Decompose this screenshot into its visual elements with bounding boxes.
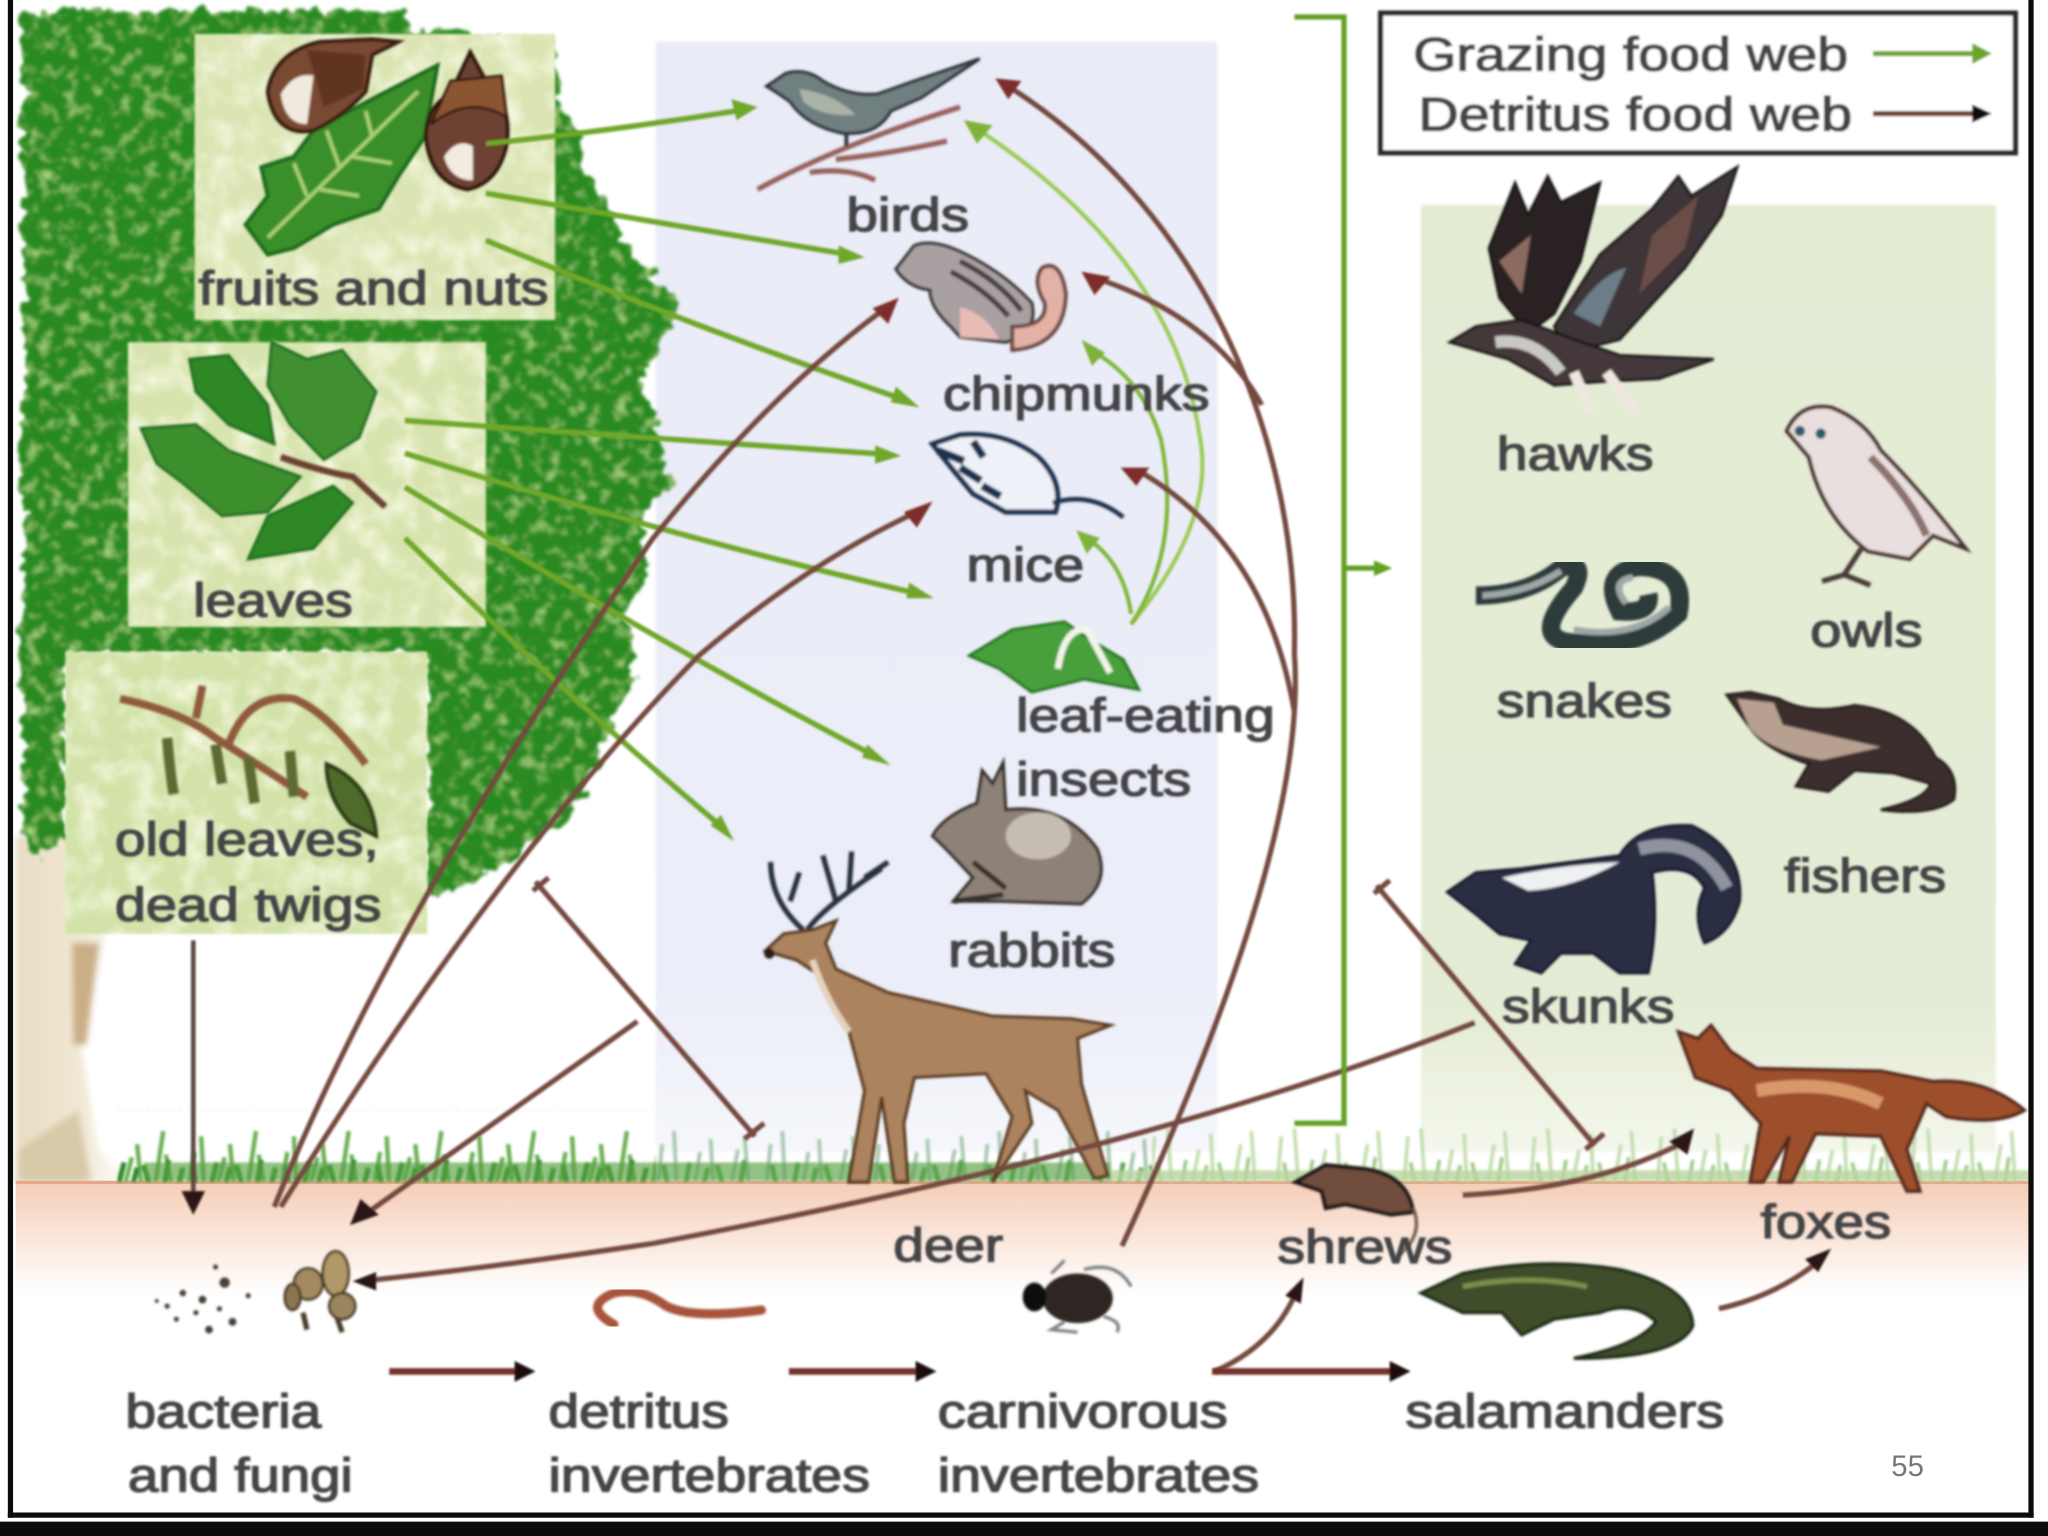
labels: bacteria [125,1385,322,1438]
panel: old leaves and dead twigs [65,652,427,934]
icon: salamander [1421,1264,1693,1358]
labels: salamanders [1405,1385,1724,1438]
labels: rabbits [948,924,1115,977]
icon: old leaves and dead twigs [120,686,376,836]
panel: fruits and nuts [195,34,555,320]
labels: foxes [1761,1195,1891,1248]
labels: fishers [1784,849,1946,902]
labels: leaves [193,573,353,626]
arrows: grazing food web from plants [405,99,934,841]
labels: detritus [549,1385,729,1438]
icon: fox [1678,1025,2024,1191]
labels: invertebrates [938,1449,1259,1502]
labels: and fungi [128,1449,353,1502]
icon: shrew [1296,1165,1416,1254]
labels: invertebrates [549,1449,870,1502]
labels: mice [967,538,1084,591]
tree foliage [24,9,679,896]
icon: rabbit [933,763,1101,904]
legend: Detritus food web [1418,88,1852,141]
icon: hawk [1450,167,1737,411]
arrows: detritus food web [182,78,1831,1371]
labels: owls [1810,604,1923,657]
icon: bird [758,59,980,189]
panel: primary consumers background [656,42,1217,1152]
labels [115,188,1946,1502]
panel: secondary consumers background [1421,205,1996,1152]
labels: leaf-eating [1016,688,1275,741]
icon: fisher [1727,692,1955,812]
labels: birds [846,188,969,241]
soil strip [16,1181,2031,1293]
icon: bacteria [155,1264,251,1334]
icon: mouse [933,434,1123,517]
grass strip [118,1110,2031,1182]
legend: Grazing food web [1413,28,1848,81]
labels: old leaves, [115,813,379,866]
labels: chipmunks [943,367,1209,420]
labels: fruits and nuts [199,261,549,314]
icon: owl [1787,407,1966,585]
arrows: grazing links from leaf-eating insects [964,120,1202,624]
labels: skunks [1502,980,1674,1033]
icon: detritus worm [598,1291,761,1324]
icon: leaves sprig [141,342,385,559]
icon: leaf-eating insects on leaf [969,622,1139,692]
labels: carnivorous [938,1385,1228,1438]
tree trunk [16,836,131,1182]
panel: leaves [128,342,486,627]
labels: shrews [1277,1220,1452,1273]
labels: dead twigs [115,878,381,931]
icon: acorns and oak leaf [246,39,508,255]
labels: hawks [1497,427,1654,480]
icon: deer [764,852,1110,1182]
labels: deer [893,1219,1003,1272]
bracket: grazing consumers [1294,17,1392,1123]
legend [1381,13,2015,153]
icon: chipmunk [896,243,1066,350]
arrows: detritus chain along the bottom [389,1361,1411,1382]
icon: skunk [1447,825,1740,973]
page number: 55 [1891,1450,1924,1483]
labels: insects [1016,752,1191,805]
icon: fungi [285,1251,355,1332]
icon: snake [1476,566,1680,644]
labels: snakes [1497,674,1672,727]
icon: carnivorous beetle [1023,1260,1131,1332]
